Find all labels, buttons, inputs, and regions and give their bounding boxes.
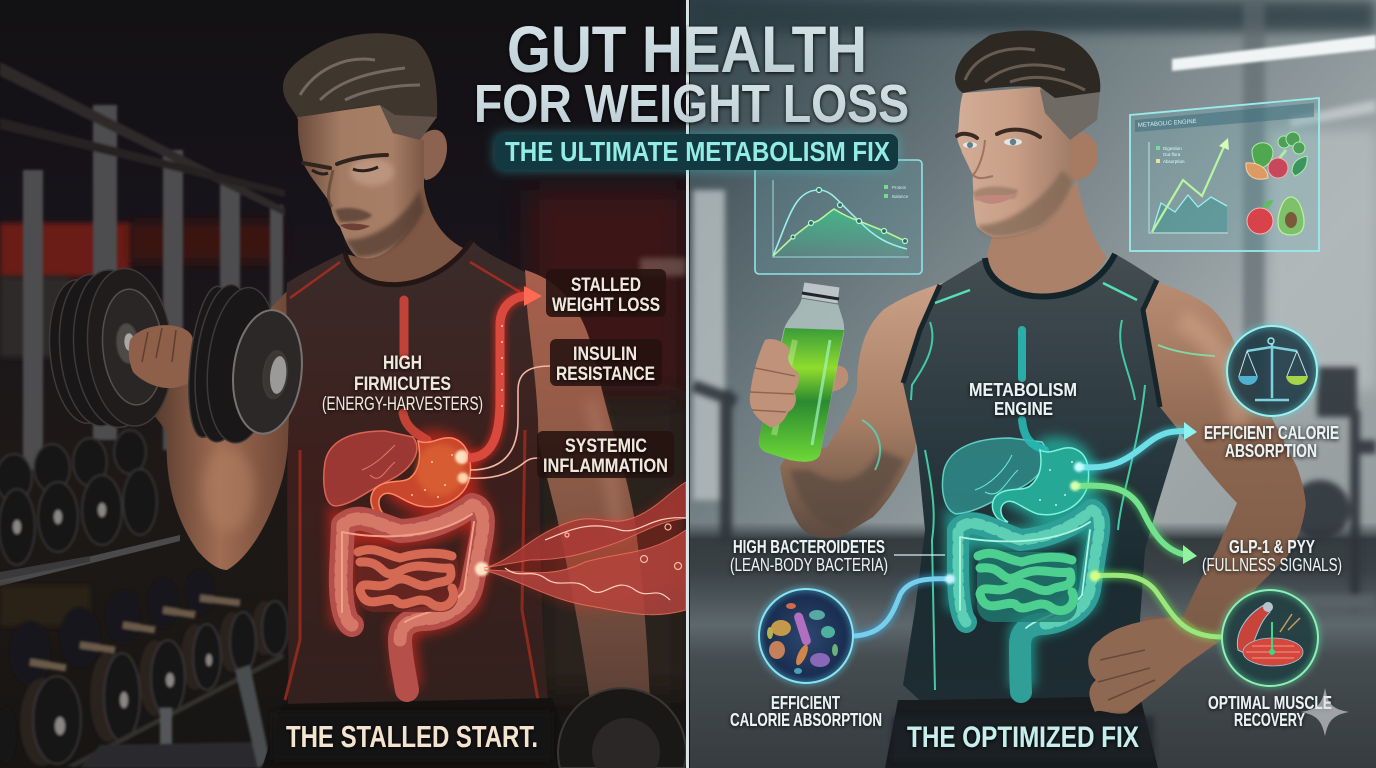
label: systemic inflammation (537, 431, 674, 478)
label: stalled weight loss: WEIGHT LOSS (552, 295, 660, 316)
stomach (992, 448, 1089, 522)
connector: systemic inflammation (468, 458, 540, 478)
ear (1069, 132, 1098, 180)
glowing nodes (945, 462, 1100, 584)
liver (324, 431, 417, 506)
left upper arm and forearm (780, 282, 945, 538)
label: efficient calorie absorption (top right): ABSORPTION (1225, 441, 1317, 461)
label: metabolism engine: METABOLISM (969, 380, 1077, 400)
label: systemic inflammation: SYSTEMIC (565, 436, 647, 457)
outer glow (958, 446, 1097, 688)
subtitle pill: THE ULTIMATE METABOLISM FIX (505, 136, 890, 167)
panel: breakdown chart and foods hologram: METABOLIC ENGINE (1138, 119, 1197, 129)
arrow: stomach to stalled weight loss (468, 286, 542, 458)
connector: bacteroidetes label (894, 554, 945, 556)
dumbbell rack (0, 430, 288, 768)
label: efficient calorie absorption (bottom left): EFFICIENT (771, 693, 840, 713)
label: efficient calorie absorption (bottom left) (730, 693, 882, 730)
teal gut diagram (942, 330, 1099, 692)
arrow: to efficient calorie absorption (1082, 422, 1197, 467)
man: stalled physique (133, 33, 650, 768)
label: high bacteroidetes: HIGH BACTEROIDETES (733, 537, 885, 557)
label: insulin resistance: RESISTANCE (556, 364, 655, 385)
label: metabolism engine (969, 380, 1077, 419)
heading: gut health: GUT HEALTH (507, 12, 867, 86)
small intestine (977, 552, 1077, 622)
right arm (525, 270, 650, 700)
icon: muscle recovery circle (1222, 590, 1318, 686)
label: systemic inflammation: INFLAMMATION (543, 456, 668, 477)
caption: the stalled start: THE STALLED START. (286, 719, 538, 754)
gripping hand (129, 325, 193, 388)
panel: breakdown chart and foods hologram: Absorption (1163, 159, 1185, 164)
shorts (262, 698, 578, 768)
gym background right (690, 0, 1376, 768)
label: high bacteroidetes: (LEAN-BODY BACTERIA) (730, 555, 888, 575)
icon: balance scale (1227, 326, 1317, 416)
esophagus and throat line (403, 300, 427, 440)
esophagus and chest line (1022, 330, 1045, 450)
hair (380, 105, 437, 140)
panel: breakdown chart and foods hologram (1130, 98, 1319, 251)
nodes (455, 450, 489, 576)
panel: wave chart hologram (755, 160, 922, 274)
head (957, 87, 1072, 237)
large intestine (341, 505, 483, 690)
green supplement bottle (750, 282, 848, 462)
neck (985, 180, 1107, 296)
label: stalled weight loss: STALLED (571, 275, 641, 296)
gym background left (0, 0, 686, 768)
tank top (286, 240, 548, 705)
shorts (885, 696, 1158, 768)
outer glow (342, 439, 481, 688)
panel: wave chart hologram: Balance (892, 194, 909, 199)
label: high firmicutes: FIRMICUTES (354, 374, 451, 395)
connector: bacteria to colon (854, 579, 950, 636)
label: stalled weight loss (546, 269, 666, 317)
hair (1040, 90, 1100, 140)
hand on hip (1088, 617, 1217, 714)
label: GLP-1 and PYY: GLP-1 & PYY (1229, 537, 1315, 557)
panel: wave chart hologram: Protein (892, 185, 907, 190)
small intestine (358, 548, 458, 612)
connector: insulin resistance (470, 366, 550, 470)
label: high bacteroidetes (730, 537, 888, 575)
man: optimized physique (780, 31, 1306, 768)
label: high firmicutes: HIGH (383, 353, 422, 374)
panel: the optimized fix (right) (690, 0, 1376, 768)
label: efficient calorie absorption (bottom left): CALORIE ABSORPTION (730, 710, 882, 730)
red gut diagram (324, 300, 489, 690)
connector: colon to muscle (1095, 575, 1222, 637)
caption: the optimized fix: THE OPTIMIZED FIX (907, 721, 1139, 754)
bent left arm (133, 290, 291, 570)
panel: the stalled start (left) (0, 0, 686, 768)
thumb behind bottle (828, 366, 848, 392)
center divider (686, 0, 689, 768)
raised dumbbell (43, 265, 310, 450)
label: efficient calorie absorption (top right) (1204, 423, 1339, 461)
caption: the stalled start (272, 712, 552, 760)
bottle body (759, 298, 844, 462)
label: high firmicutes (322, 353, 483, 415)
inflamed vessels to right edge (484, 482, 686, 615)
fingers (750, 339, 799, 427)
heading: for weight loss: FOR WEIGHT LOSS (474, 74, 909, 134)
stomach (371, 438, 470, 516)
label: GLP-1 and PYY (1202, 537, 1342, 575)
ear (419, 130, 447, 180)
title block (474, 12, 909, 170)
icon: gut bacteria circle (759, 589, 853, 683)
tank top (903, 254, 1180, 705)
food icons (1246, 132, 1307, 235)
label: optimal muscle recovery (1208, 693, 1332, 730)
liver (942, 438, 1046, 514)
bottle cap (801, 282, 840, 304)
label: high firmicutes: (ENERGY-HARVESTERS) (322, 394, 483, 415)
neck (343, 187, 468, 287)
lower dumbbell (558, 688, 686, 768)
label: insulin resistance: INSULIN (573, 344, 637, 365)
icon: sparkle watermark (1301, 688, 1349, 736)
arrow: to GLP-1 and PYY (1078, 486, 1197, 564)
panel: breakdown chart and foods hologram: Gut flora (1163, 152, 1181, 157)
label: insulin resistance (550, 339, 662, 386)
label: optimal muscle recovery: RECOVERY (1234, 710, 1305, 730)
label: optimal muscle recovery: OPTIMAL MUSCLE (1208, 693, 1332, 713)
head (297, 105, 424, 259)
panel: breakdown chart and foods hologram: Digestion (1163, 146, 1182, 151)
caption: the optimized fix (892, 716, 1154, 760)
large intestine (958, 510, 1099, 692)
label: metabolism engine: ENGINE (994, 399, 1053, 419)
right arm on hip (1143, 280, 1306, 667)
